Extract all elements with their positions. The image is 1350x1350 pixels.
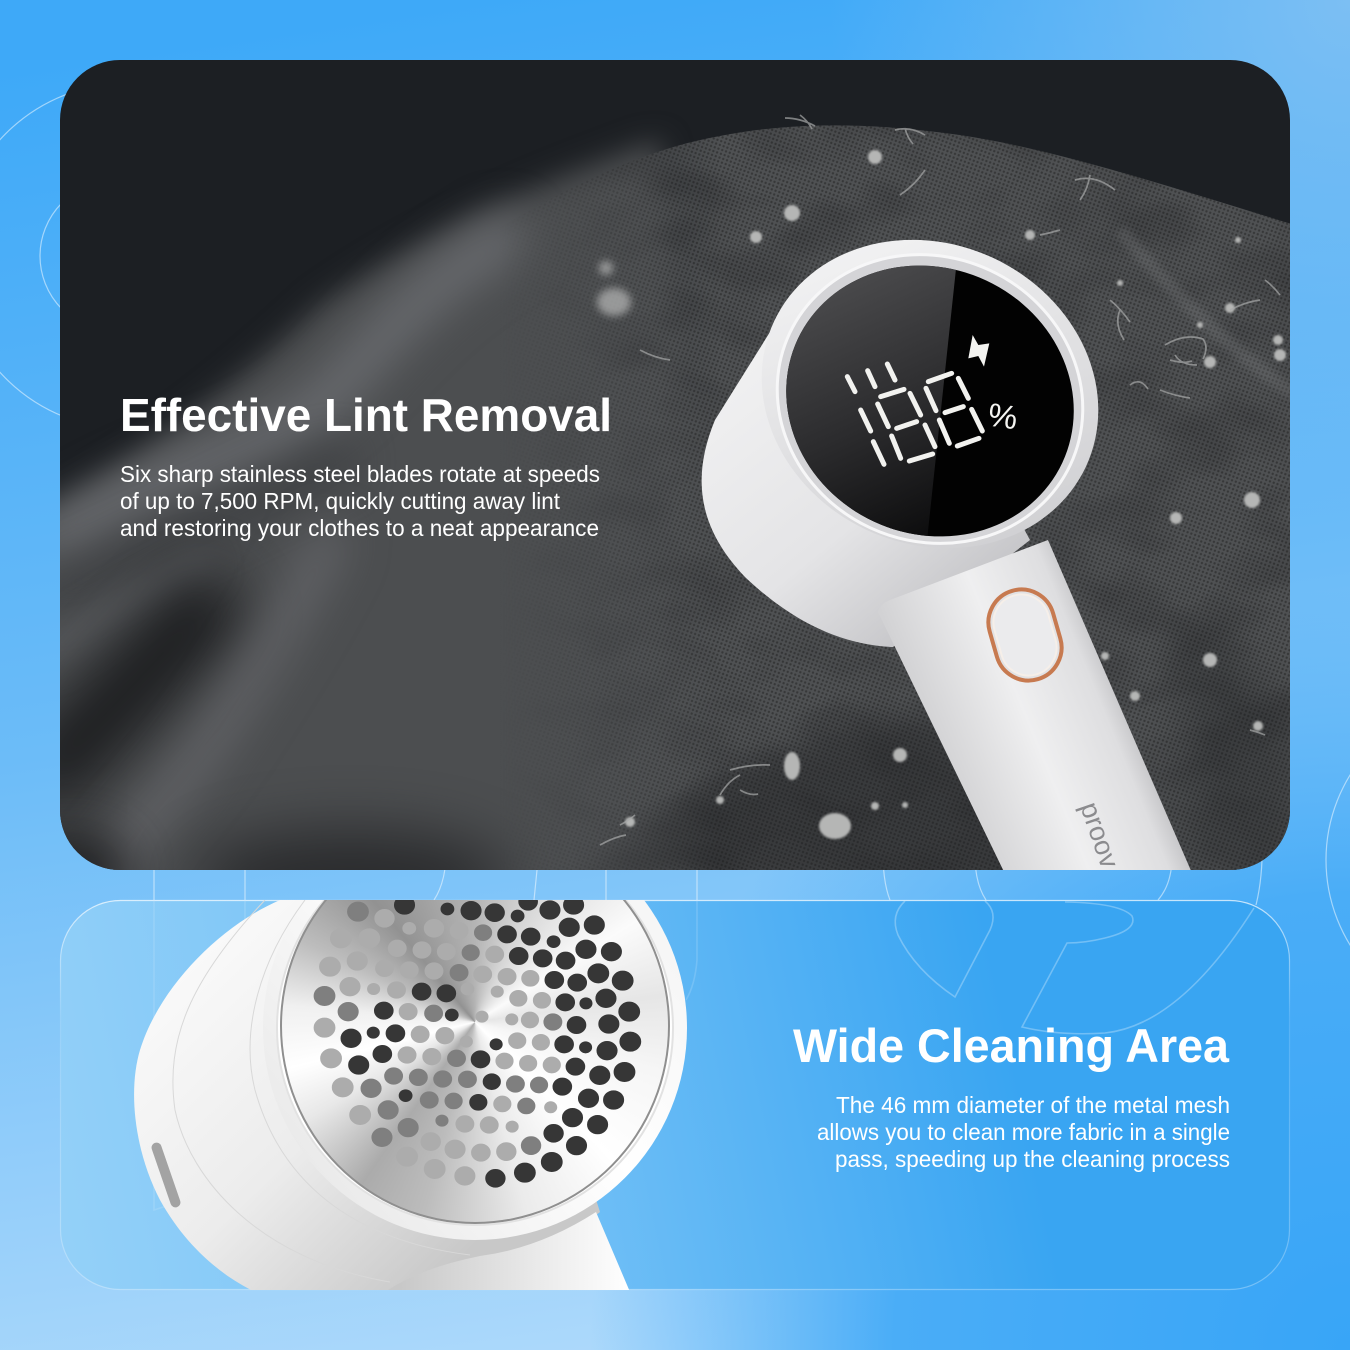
display screen [786, 266, 1074, 536]
heading: wide cleaning area: Wide Cleaning Area [793, 1019, 1230, 1072]
illustration: lint shaver blade head [134, 900, 687, 1290]
mid grey holes [315, 903, 561, 1154]
decorative background outlines [0, 83, 1350, 1022]
photo: blurred fabric foreground [60, 134, 684, 870]
heading: effective lint removal: Effective Lint Removal [120, 389, 612, 441]
text: wide cleaning area description [817, 1092, 1230, 1172]
body of shaver [134, 896, 600, 1292]
side slot [152, 1142, 180, 1208]
seven segment reading [847, 364, 982, 464]
handle of shaver [432, 1212, 629, 1290]
text: effective lint removal description [120, 461, 600, 541]
text: wide cleaning area description: allows you to clean more fabric in a single [817, 1119, 1230, 1145]
light grey holes [315, 910, 560, 1185]
mesh holes [315, 894, 640, 1187]
front ring [769, 240, 1098, 536]
panel: wide cleaning area [60, 900, 1290, 1290]
text: wide cleaning area description: The 46 mm diameter of the metal mesh [836, 1092, 1230, 1118]
photo: lint balls [625, 150, 1286, 839]
seam lines [173, 900, 470, 1282]
photo: blurred lint [597, 261, 631, 316]
brand name on handle: proov [1074, 798, 1125, 872]
charging bolt icon [968, 335, 989, 367]
panel: effective lint removal [60, 60, 1290, 870]
cylinder body [702, 300, 1030, 647]
handle [878, 540, 1195, 880]
metal mesh disc [280, 900, 670, 1224]
product: lint remover with digital display [702, 185, 1195, 880]
power button [986, 587, 1064, 683]
text: effective lint removal description: Six sharp stainless steel blades rotate at speeds [120, 461, 600, 487]
dark holes [342, 894, 640, 1187]
photo: lint fibres [600, 115, 1280, 845]
decorative logo outline in panel [154, 900, 1254, 1210]
photo: textured fabric [560, 125, 1290, 870]
text: effective lint removal description: of up to 7,500 RPM, quickly cutting away lint [120, 488, 561, 514]
outer ring [332, 900, 687, 1240]
text: wide cleaning area description: pass, speeding up the cleaning process [835, 1146, 1230, 1172]
text: effective lint removal description: and restoring your clothes to a neat appearance [120, 515, 599, 541]
percent sign: % [986, 396, 1020, 436]
